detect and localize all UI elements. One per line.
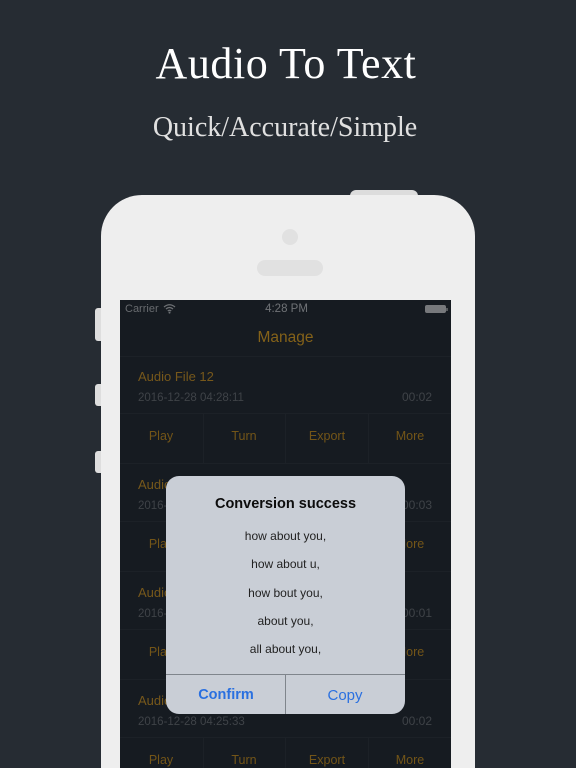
row 4 actions: More (396, 753, 424, 767)
row 2 duration: 00:03 (402, 498, 432, 512)
row 1 actions (149, 429, 424, 443)
row 3 actions: More (396, 645, 424, 659)
row 1 actions: More (396, 429, 424, 443)
row 1 actions: Export (309, 429, 345, 443)
row 4 actions (149, 753, 424, 767)
status bar time: 4:28 PM (265, 303, 308, 315)
dialog message: how bout you, (248, 586, 323, 600)
dialog title: Conversion success (215, 496, 356, 512)
row 1 duration: 00:02 (402, 390, 432, 404)
front camera (282, 229, 298, 245)
dialog message: all about you, (250, 642, 321, 656)
status bar carrier: Carrier (125, 303, 159, 315)
side button: volume down (95, 451, 103, 473)
row 3 title: Audio File 10 (138, 585, 214, 600)
row 1 actions: Play (149, 429, 173, 443)
row 2 title: Audio File 11 (138, 477, 213, 492)
row 3 date: 2016-12-28 04:26:12 (138, 608, 245, 620)
power button (350, 190, 418, 200)
row 4 date: 2016-12-28 04:25:33 (138, 716, 245, 728)
row 1 date: 2016-12-28 04:28:11 (138, 392, 244, 404)
row 2 actions: More (396, 537, 424, 551)
row 2 actions: Play (149, 537, 173, 551)
app screen (120, 300, 451, 768)
row 4 actions: Export (309, 753, 345, 767)
speaker (257, 260, 323, 276)
dialog horizontal divider (166, 674, 405, 675)
icon: wifi (164, 304, 176, 314)
row 4 actions: Play (149, 753, 173, 767)
dialog message: how about u, (251, 557, 320, 571)
row 2 actions (149, 537, 424, 551)
subtitle: Quick/Accurate/Simple (153, 112, 417, 143)
dialog panel (166, 476, 405, 714)
dialog message: how about you, (245, 529, 326, 543)
side button: volume up (95, 384, 103, 406)
row 4 title: Audio File 9 (138, 693, 207, 708)
row 4 duration: 00:02 (402, 714, 432, 728)
dialog message: about you, (257, 614, 314, 628)
nav title: Manage (257, 329, 314, 346)
row 4 actions: Turn (231, 753, 257, 767)
phone body (101, 195, 475, 768)
row 2 date: 2016-12-28 04:27:40 (138, 500, 245, 512)
icon: battery (425, 305, 448, 313)
row separators (120, 300, 451, 768)
row 1 title: Audio File 12 (138, 369, 214, 384)
side button: mute (95, 308, 103, 341)
confirm button: Confirm (198, 687, 254, 703)
copy button: Copy (327, 687, 363, 704)
row 3 actions: Play (149, 645, 173, 659)
row 3 actions (149, 645, 424, 659)
row 3 duration: 00:01 (402, 606, 432, 620)
title: Audio To Text (156, 39, 416, 88)
dialog vertical divider (285, 674, 286, 714)
row 1 actions: Turn (231, 429, 257, 443)
